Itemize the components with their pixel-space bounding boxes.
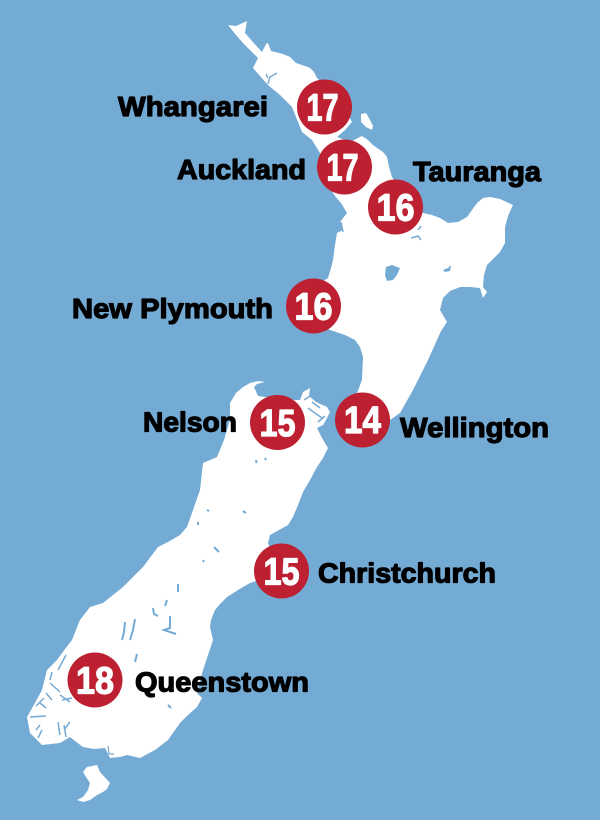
marker: Tauranga: 16	[376, 188, 414, 230]
label: Tauranga: Tauranga	[413, 156, 541, 187]
label: Wellington: Wellington	[400, 412, 549, 443]
marker: Wellington	[335, 392, 390, 448]
Foveaux Strait coast notch	[108, 746, 114, 754]
marker: Auckland	[317, 140, 372, 194]
label: Christchurch: Christchurch	[318, 558, 496, 588]
marker: Queenstown: 18	[76, 660, 114, 702]
label: Queenstown: Queenstown	[135, 666, 309, 698]
Great Barrier Island	[361, 113, 373, 130]
label: Auckland: Auckland	[177, 154, 306, 185]
Fiordland inlets	[30, 655, 72, 738]
label: Whangarei: Whangarei	[118, 91, 268, 122]
marker: Whangarei	[297, 80, 352, 134]
marker: Whangarei: 17	[306, 88, 338, 130]
marker: Nelson	[250, 395, 305, 450]
marker: Tauranga	[368, 180, 423, 234]
Marlborough Sounds inlets	[304, 396, 325, 422]
marker: Christchurch	[254, 544, 309, 598]
label: New Plymouth: New Plymouth	[72, 293, 273, 324]
southern lakes	[122, 458, 266, 708]
marker: New Plymouth	[286, 278, 341, 334]
Northland inlets	[266, 73, 277, 84]
label: Nelson: Nelson	[143, 406, 237, 438]
Lake Waikaremoana	[443, 265, 451, 272]
marker: Auckland: 17	[326, 148, 358, 190]
marker: Nelson: 15	[260, 403, 296, 445]
marker: Wellington: 14	[344, 400, 381, 442]
marker: New Plymouth: 16	[294, 286, 332, 328]
marker: Queenstown	[68, 652, 122, 708]
Bay of Plenty inlets	[341, 222, 421, 240]
North Island	[228, 21, 513, 425]
Stewart Island	[77, 765, 110, 802]
marker: Christchurch: 15	[264, 552, 300, 594]
Lake Taupo	[385, 265, 400, 281]
South Island	[27, 381, 330, 758]
